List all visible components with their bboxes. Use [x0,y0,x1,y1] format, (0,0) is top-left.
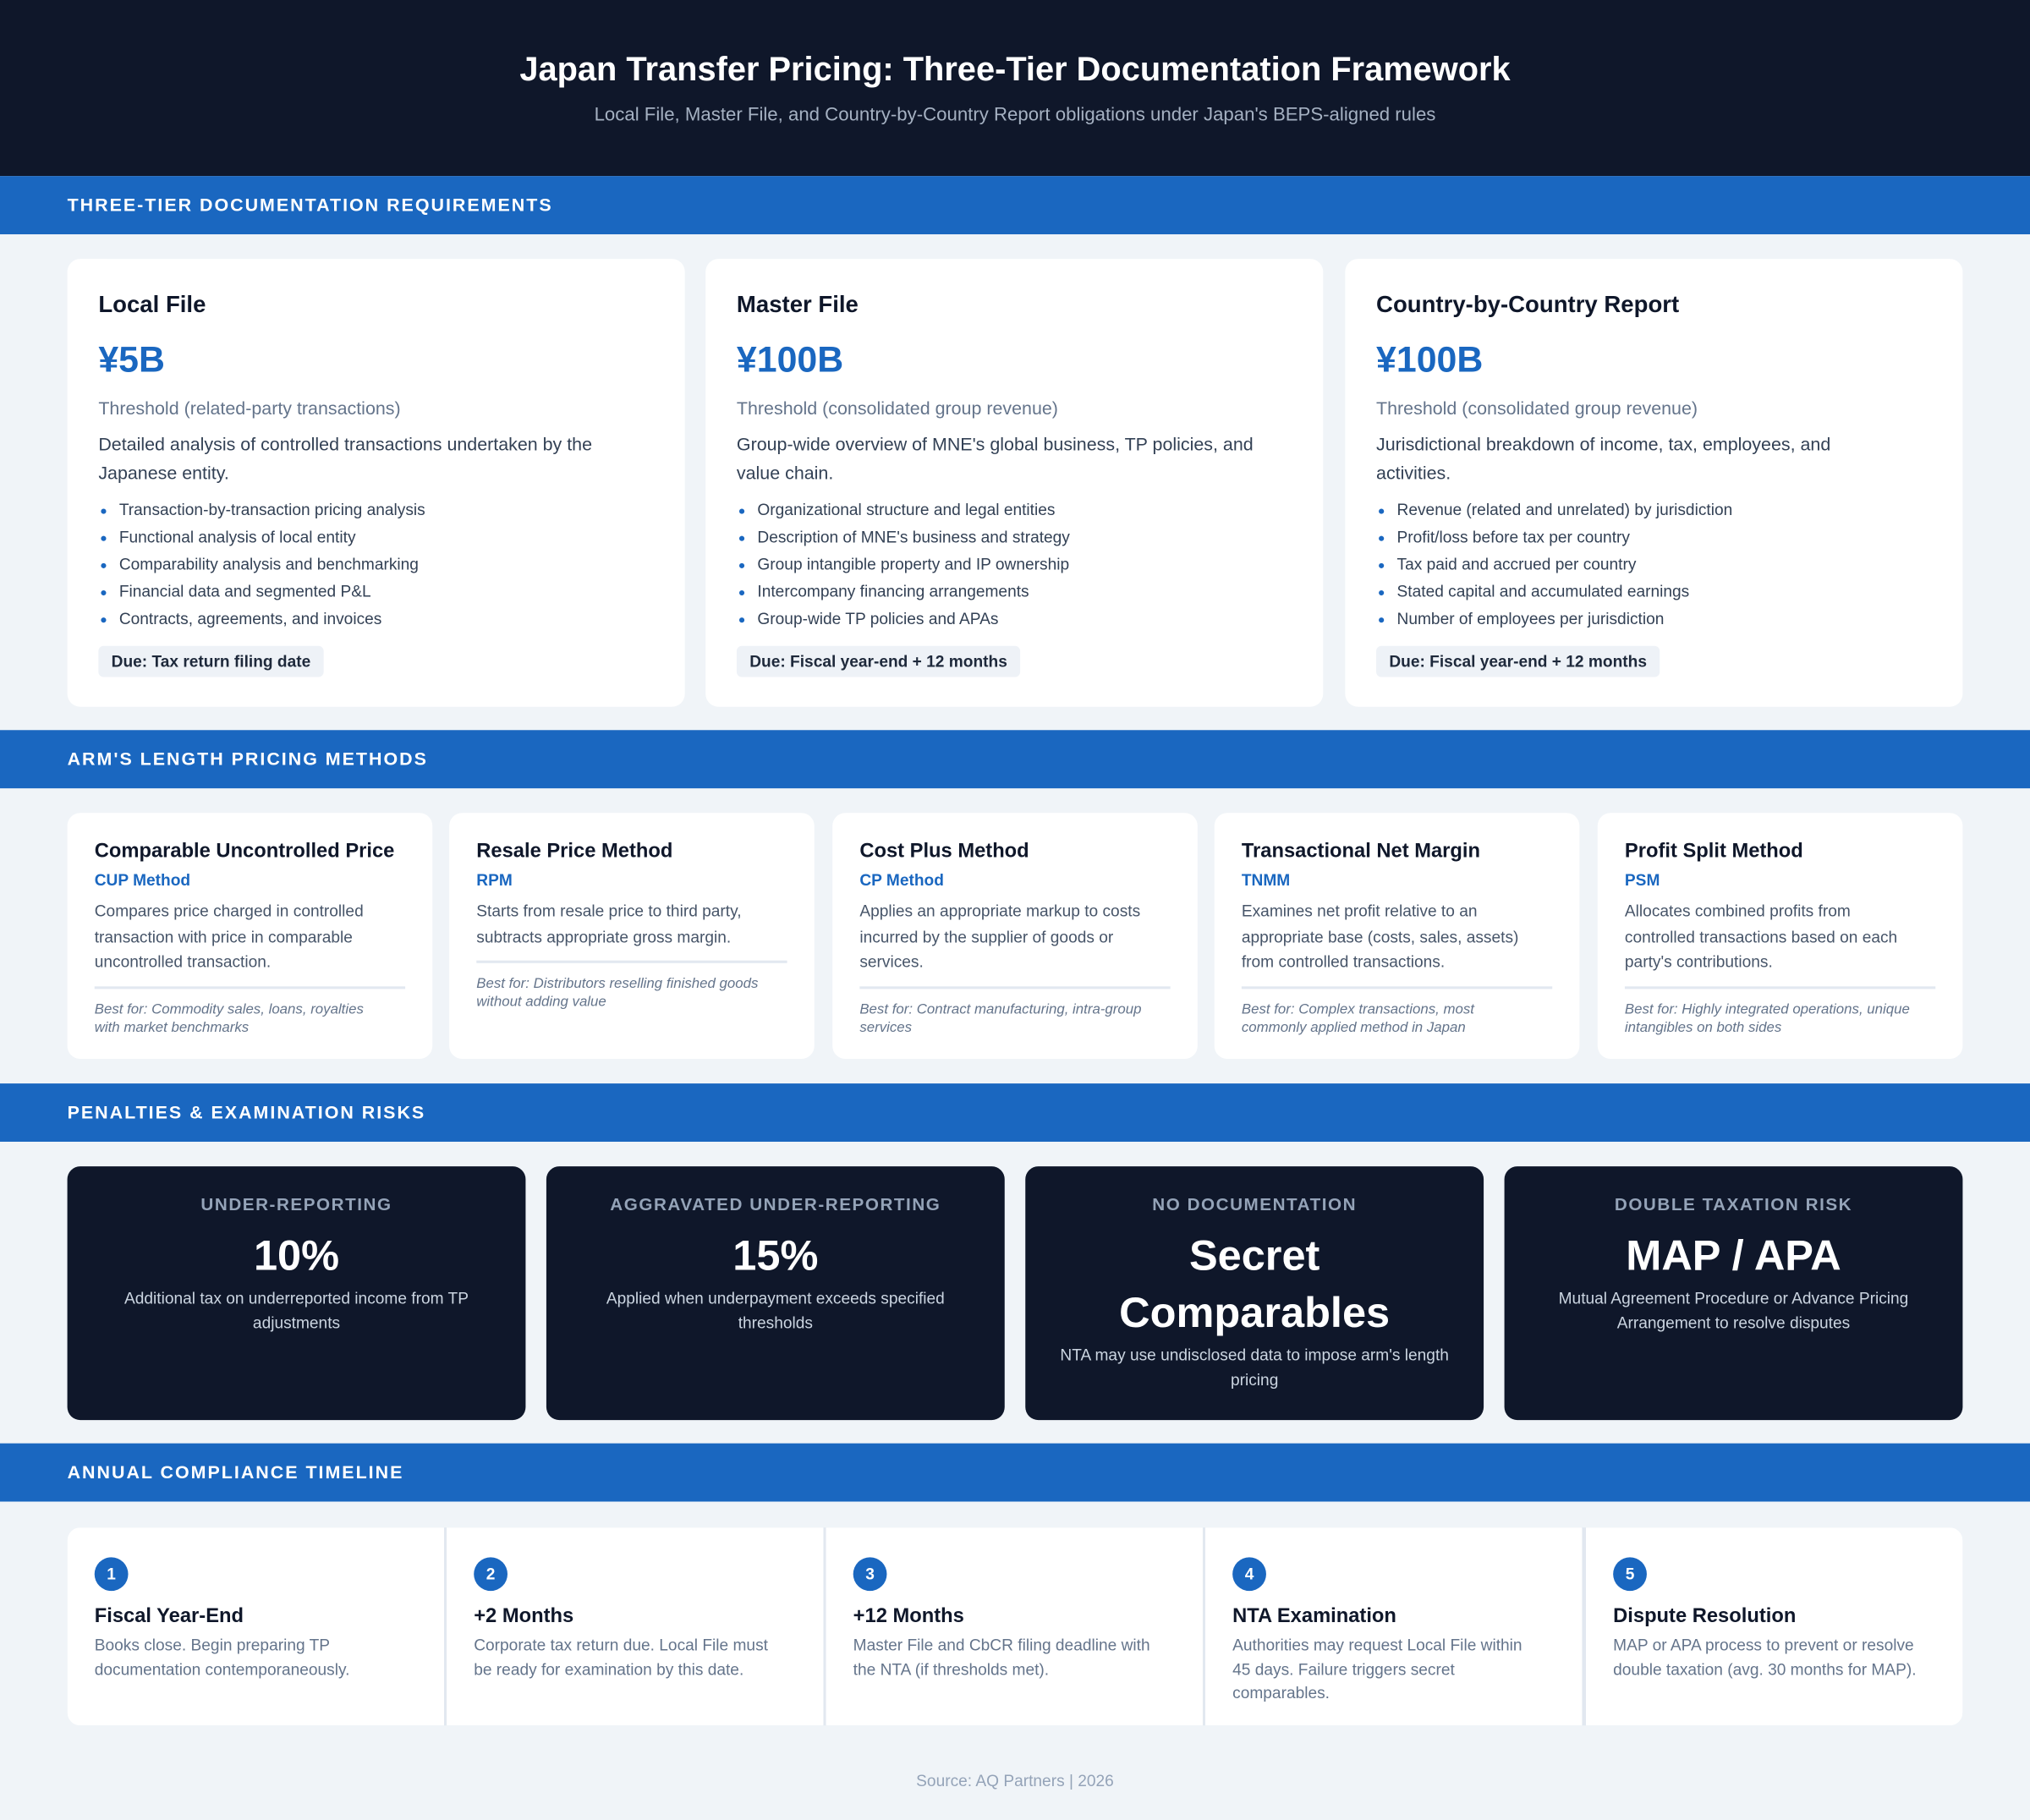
section heading: three-tier: THREE-TIER DOCUMENTATION REQUIREMENTS [68,195,553,215]
section heading: methods: ARM'S LENGTH PRICING METHODS [68,748,428,769]
step 1: 1 [107,1565,116,1583]
panel: local file: Financial data and segmented P&L [119,583,371,600]
method: TNMM: TNMM [1242,871,1290,890]
method: CUP: Compares price charged in controlled transaction with price in comparable uncontrolled transaction. [95,902,364,971]
timeline [68,1527,1962,1725]
penalty: aggravated: AGGRAVATED UNDER-REPORTING [610,1195,941,1214]
panel: master file: Intercompany financing arrangements [757,583,1029,600]
section heading: timeline: ANNUAL COMPLIANCE TIMELINE [68,1461,403,1483]
step 5: Dispute Resolution [1613,1605,1796,1627]
panel: local file: Functional analysis of local entity [119,528,356,546]
panel: master file: Threshold (consolidated group revenue) [737,397,1058,418]
method: PSM: Allocates combined profits from controlled transactions based on each party's contributions. [1625,902,1897,971]
method: TNMM: Examines net profit relative to an appropriate base (costs, sales, assets) from controlled transactions. [1242,902,1518,971]
header [0,0,2030,176]
penalty: double taxation: Mutual Agreement Procedure or Advance Pricing Arrangement to resolve disputes [1559,1289,1908,1331]
method: PSM: Best for: Highly integrated operations, unique intangibles on both sides [1625,1001,1910,1035]
panel: master file [705,259,1323,707]
penalty: no documentation: Comparables [1119,1288,1390,1336]
step 3: +12 Months [853,1605,964,1627]
method: CP: CP Method [859,871,944,890]
step 1: Books close. Begin preparing TP documentation contemporaneously. [95,1636,349,1678]
step 3: Master File and CbCR filing deadline with the NTA (if thresholds met). [853,1636,1150,1678]
method: TNMM: Transactional Net Margin [1242,840,1480,862]
penalty: double taxation: MAP / APA [1626,1231,1841,1279]
step 4 [1205,1527,1582,1725]
method: PSM: PSM [1625,871,1660,890]
section heading: timeline [0,1444,2030,1502]
step 1: Fiscal Year-End [95,1605,244,1627]
method: RPM: Resale Price Method [476,840,672,862]
penalty: double taxation [1505,1166,1962,1420]
panel: cbcr: Country-by-Country Report [1376,291,1679,317]
method: RPM: Starts from resale price to third party, subtracts appropriate gross margin. [476,902,742,946]
method: PSM [1598,813,1962,1059]
method: PSM: Profit Split Method [1625,840,1803,862]
method: CUP: Best for: Commodity sales, loans, royalties with market benchmarks [95,1001,364,1035]
panel: local file: Transaction-by-transaction pricing analysis [119,501,425,519]
section heading: penalties [0,1083,2030,1142]
penalty: aggravated: Applied when underpayment exceeds specified thresholds [606,1289,945,1331]
penalty: no documentation [1025,1166,1484,1420]
method: RPM [449,813,815,1059]
step 5: 5 [1626,1565,1634,1583]
panel: cbcr: Stated capital and accumulated earnings [1397,583,1689,600]
footer source: Source: AQ Partners | 2026 [916,1772,1114,1790]
step 3 [826,1527,1203,1725]
penalty: under-reporting: 10% [254,1231,339,1279]
panel: local file [68,259,685,707]
panel: local file: ¥5B [98,339,165,379]
section heading: penalties: PENALTIES & EXAMINATION RISKS [68,1102,425,1122]
method: CUP [68,813,432,1059]
panel: local file: Contracts, agreements, and invoices [119,610,381,628]
method: CUP: Comparable Uncontrolled Price [95,840,394,862]
method: CP: Best for: Contract manufacturing, intra-group services [859,1001,1141,1035]
panel: cbcr: Due: Fiscal year-end + 12 months [1389,652,1647,671]
penalty: no documentation: Secret [1189,1231,1320,1279]
step 2: 2 [486,1565,495,1583]
method: CP: Cost Plus Method [859,840,1029,862]
penalty: under-reporting: Additional tax on underreported income from TP adjustments [124,1289,469,1331]
panel: local file: Threshold (related-party transactions) [98,397,401,418]
panel: master file: Group intangible property and IP ownership [757,556,1069,573]
panel: master file: Description of MNE's business and strategy [757,528,1070,546]
panel: local file: Local File [98,291,206,317]
panel: local file: Detailed analysis of controlled transactions undertaken by the Japanese entity. [98,434,592,483]
step 2 [447,1527,823,1725]
penalty: aggravated: 15% [732,1231,818,1279]
panel: cbcr: Number of employees per jurisdiction [1397,610,1664,628]
step 5: MAP or APA process to prevent or resolve double taxation (avg. 30 months for MAP). [1613,1636,1917,1678]
penalty: aggravated [546,1166,1005,1420]
panel: cbcr: Tax paid and accrued per country [1397,556,1636,573]
subtitle: Local File, Master File, and Country-by-Country Report obligations under Japan's BEPS-aligned rules [595,105,1435,125]
section heading: methods [0,730,2030,788]
panel: local file: Comparability analysis and benchmarking [119,556,419,573]
method: CUP: CUP Method [95,871,190,890]
step 3: 3 [865,1565,875,1583]
panel: cbcr: Jurisdictional breakdown of income, tax, employees, and activities. [1376,434,1830,483]
panel: master file: Organizational structure and legal entities [757,501,1055,519]
method: TNMM [1215,813,1579,1059]
penalty: no documentation: NO DOCUMENTATION [1152,1195,1357,1214]
method: CP [832,813,1198,1059]
method: RPM: Best for: Distributors reselling finished goods without adding value [476,976,758,1010]
step 1 [68,1527,444,1725]
penalty: under-reporting [68,1166,525,1420]
method: RPM: RPM [476,871,513,890]
step 4: NTA Examination [1232,1605,1396,1627]
step 5 [1586,1527,1962,1725]
panel: cbcr: Revenue (related and unrelated) by jurisdiction [1397,501,1732,519]
method: CP: Applies an appropriate markup to costs incurred by the supplier of goods or services. [859,902,1140,971]
title: Japan Transfer Pricing: Three-Tier Documentation Framework [519,49,1511,88]
panel: cbcr: Profit/loss before tax per country [1397,528,1630,546]
panel: master file: Group-wide TP policies and APAs [757,610,998,628]
panel: master file: ¥100B [737,339,843,379]
step 4: Authorities may request Local File within 45 days. Failure triggers secret comparables. [1232,1636,1522,1702]
step 2: Corporate tax return due. Local File must be ready for examination by this date. [474,1636,768,1678]
method: TNMM: Best for: Complex transactions, most commonly applied method in Japan [1242,1001,1474,1035]
panel: cbcr: ¥100B [1376,339,1483,379]
step 2: +2 Months [474,1605,573,1627]
panel: master file: Group-wide overview of MNE's global business, TP policies, and value chain. [737,434,1254,483]
step 4: 4 [1245,1565,1254,1583]
panel: master file: Master File [737,291,859,317]
section heading: three-tier [0,176,2030,234]
panel: master file: Due: Fiscal year-end + 12 months [749,652,1007,671]
penalty: under-reporting: UNDER-REPORTING [200,1195,392,1214]
panel: local file: Due: Tax return filing date [112,652,310,671]
panel: cbcr [1345,259,1962,707]
panel: cbcr: Threshold (consolidated group revenue) [1376,397,1698,418]
penalty: no documentation: NTA may use undisclosed data to impose arm's length pricing [1060,1346,1449,1389]
penalty: double taxation: DOUBLE TAXATION RISK [1615,1195,1852,1214]
